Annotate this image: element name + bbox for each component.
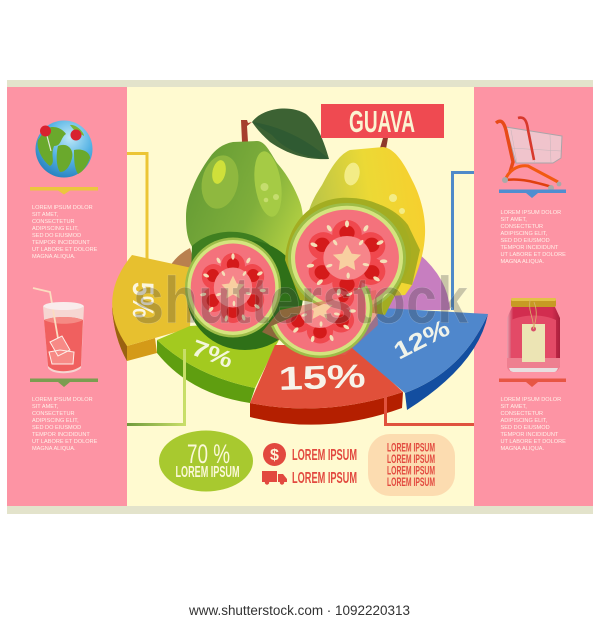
text block: right bottom: SIT AMET, [500,404,527,410]
text block: left top: ADIPISCING ELIT, [32,226,79,232]
caption: LOREM IPSUM [176,464,240,481]
icon: dollar: $ [270,447,279,464]
slice: green 7% [157,320,290,403]
box text: LOREM IPSUM [387,477,435,489]
text block: right top: ADIPISCING ELIT, [500,231,548,237]
title text: GUAVA [349,104,415,139]
body [306,147,425,300]
footer url: www.shutterstock.com · 1092220313 [188,603,410,618]
left pink panel [7,87,127,506]
icon: shopping cart [496,118,562,191]
jar label [522,324,545,362]
text block: left bottom: SIT AMET, [32,404,59,410]
body [186,141,304,300]
pins [46,132,51,151]
box text: LOREM IPSUM [387,442,435,454]
text block: right bottom: CONSECTETUR [500,411,543,417]
stem [380,138,388,149]
text block: right top: SED DO EIUSMOD [500,238,550,244]
slice: red 15% [250,345,403,425]
text block: right bottom: SED DO EIUSMOD [500,425,550,431]
text block: right bottom: LOREM IPSUM DOLOR [500,397,561,403]
title banner [321,104,444,139]
pie chart back slices [170,248,450,310]
green guava [186,120,304,345]
value: 70 % [187,439,230,469]
icon: jam jar [507,298,560,372]
leaf [252,108,329,159]
divider: left bottom [30,378,98,387]
slice: blue 12% [352,308,488,410]
icon: globe [36,120,92,178]
text block: left top: MAGNA ALIQUA. [32,254,76,260]
highlight patches [197,152,243,212]
connector: green [127,349,184,424]
icon: truck [262,471,287,485]
label: 15%: 15% [278,357,366,397]
slice: purple [350,253,450,310]
icon: dollar [263,443,286,466]
slice: brown [170,248,200,280]
text block: right bottom: UT LABORE ET DOLORE [500,439,566,445]
text block: left top: SED DO EIUSMOD [32,233,81,239]
divider: right bottom [499,378,566,387]
text block: right top: TEMPOR INCIDIDUNT [500,245,559,251]
connector: blue [452,172,474,310]
text block: left top: TEMPOR INCIDIDUNT [32,240,90,246]
watermark: shutterstock [133,263,468,337]
text block: left bottom: ADIPISCING ELIT, [32,418,79,424]
callout: 70% oval [159,430,253,492]
yellow guava [300,138,425,300]
box text: LOREM IPSUM [387,454,435,466]
connector: red [386,395,474,424]
text block: right top: CONSECTETUR [500,224,543,230]
pie chart front slices [112,255,488,425]
right pink panel [474,87,593,506]
text block: right bottom: MAGNA ALIQUA. [500,446,544,452]
text block: left bottom: UT LABORE ET DOLORE [32,439,98,445]
highlight [342,161,362,187]
divider: left top [30,187,98,194]
text block: right bottom: TEMPOR INCIDIDUNT [500,432,559,438]
guava half: right [285,198,411,315]
connector: yellow [127,154,147,262]
text block: right top: UT LABORE ET DOLORE [500,252,566,258]
text block: left top: CONSECTETUR [32,219,75,225]
text block: right top: LOREM IPSUM DOLOR [500,210,561,216]
spots [389,194,397,202]
stem [241,120,252,142]
text block: right top: MAGNA ALIQUA. [500,259,544,265]
central cream panel [127,87,474,506]
divider: right top [499,190,566,198]
text block: left bottom: LOREM IPSUM DOLOR [32,397,93,403]
label: 12%: 12% [389,315,454,365]
outer frame band [7,80,593,514]
callout: lorem box [368,434,455,496]
text block: left bottom: MAGNA ALIQUA. [32,446,76,452]
lower shading [190,232,300,345]
text block: left top: UT LABORE ET DOLORE [32,247,98,253]
text block: right bottom: ADIPISCING ELIT, [500,418,548,424]
box text: LOREM IPSUM [387,466,435,478]
icon: juice glass [33,288,84,373]
text block: left bottom: CONSECTETUR [32,411,75,417]
text block: right top: SIT AMET, [500,217,527,223]
text block: left bottom: TEMPOR INCIDIDUNT [32,432,90,438]
label: dollar: LOREM IPSUM [292,447,357,464]
guava half: left [185,238,303,350]
text block: left top: LOREM IPSUM DOLOR [32,205,93,211]
text block: left bottom: SED DO EIUSMOD [32,425,81,431]
label: 7%: 7% [188,334,237,373]
label: 5%: 5% [126,282,159,318]
guava half: bottom [262,286,378,358]
label: truck: LOREM IPSUM [292,470,357,487]
text block: left top: SIT AMET, [32,212,59,218]
slice: yellow 5% [112,255,192,361]
shading band [300,199,420,285]
